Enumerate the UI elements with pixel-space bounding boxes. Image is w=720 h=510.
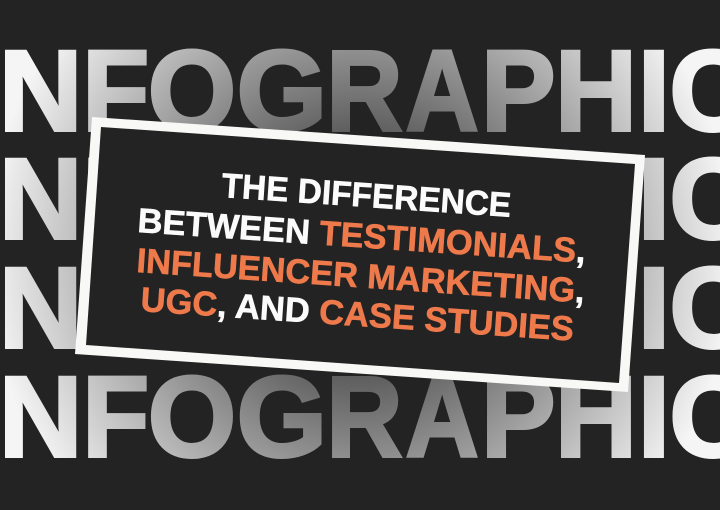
background repeated word INFOGRAPHIC: N: [0, 244, 83, 372]
background repeated word INFOGRAPHIC: A: [406, 244, 479, 372]
title: line 2: BETWEEN TESTIMONIALS,: [136, 202, 587, 271]
background repeated word INFOGRAPHIC: O: [148, 28, 236, 156]
background repeated word INFOGRAPHIC: F: [82, 136, 149, 264]
background repeated word INFOGRAPHIC: N: [0, 354, 83, 482]
background repeated word INFOGRAPHIC: I: [638, 354, 670, 482]
background repeated word INFOGRAPHIC: H: [555, 28, 637, 156]
background repeated word INFOGRAPHIC: F: [82, 354, 149, 482]
background repeated word INFOGRAPHIC: H: [555, 244, 637, 372]
background repeated word INFOGRAPHIC: A: [406, 136, 479, 264]
title: line 1: THE DIFFERENCE: [220, 167, 512, 225]
background repeated word INFOGRAPHIC: O: [148, 354, 236, 482]
background repeated word INFOGRAPHIC: R: [326, 136, 403, 264]
background repeated word INFOGRAPHIC: R: [326, 354, 403, 482]
background repeated word INFOGRAPHIC: A: [406, 28, 479, 156]
background repeated word INFOGRAPHIC: A: [406, 354, 479, 482]
background repeated word INFOGRAPHIC: F: [82, 28, 149, 156]
background repeated word INFOGRAPHIC: G: [236, 354, 327, 482]
background repeated word INFOGRAPHIC: R: [326, 244, 403, 372]
background repeated word INFOGRAPHIC: P: [481, 28, 556, 156]
background repeated word INFOGRAPHIC: H: [555, 136, 637, 264]
title: line 4: UGC, AND CASE STUDIES: [139, 281, 575, 349]
background repeated word INFOGRAPHIC: G: [236, 28, 327, 156]
background repeated word INFOGRAPHIC: I: [638, 28, 670, 156]
background repeated word INFOGRAPHIC: H: [555, 354, 637, 482]
tilted title card: [75, 117, 645, 392]
background repeated word INFOGRAPHIC: N: [0, 136, 83, 264]
background repeated word INFOGRAPHIC: P: [481, 136, 556, 264]
background repeated word INFOGRAPHIC: I: [638, 244, 670, 372]
background repeated word INFOGRAPHIC: N: [0, 28, 83, 156]
background repeated word INFOGRAPHIC: O: [148, 244, 236, 372]
background repeated word INFOGRAPHIC: P: [481, 244, 556, 372]
background repeated word INFOGRAPHIC: O: [148, 136, 236, 264]
background repeated word INFOGRAPHIC: P: [481, 354, 556, 482]
background repeated word INFOGRAPHIC: G: [236, 244, 327, 372]
background repeated word INFOGRAPHIC: I: [638, 136, 670, 264]
title: line 3: INFLUENCER MARKETING,: [135, 242, 586, 311]
background repeated word INFOGRAPHIC: G: [236, 136, 327, 264]
background repeated word INFOGRAPHIC: R: [326, 28, 403, 156]
background repeated word INFOGRAPHIC: F: [82, 244, 149, 372]
